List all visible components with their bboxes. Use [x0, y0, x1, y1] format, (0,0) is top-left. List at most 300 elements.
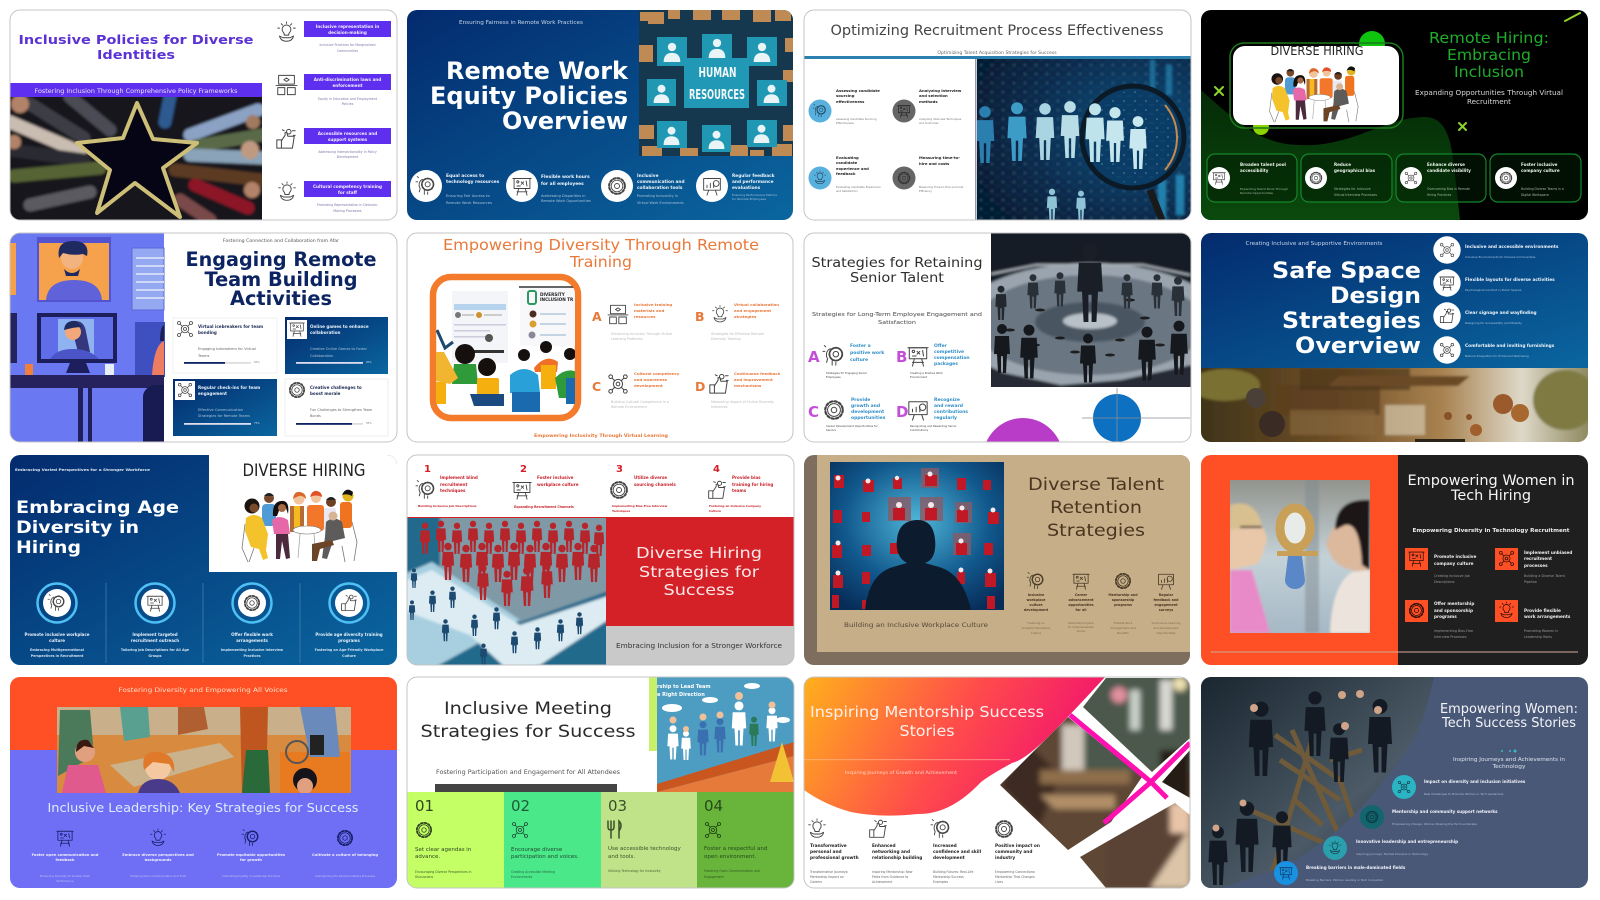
item B: virtual collaboration: Virtual collaboration: [734, 302, 779, 307]
item: assessing sourcing: effectiveness: [836, 99, 865, 104]
item: inclusive culture: culture: [1029, 603, 1043, 607]
item: inclusive communication: [601, 170, 685, 205]
item C: cultural competency: Cultural competency: [634, 371, 680, 376]
item 4: bias training: teams: [732, 488, 747, 493]
item: flexible layouts: Flexible layouts for diverse activities: [1465, 277, 1555, 283]
item: breaking barriers: Breaking barriers in male-dominated fields: [1306, 865, 1406, 870]
item: inclusive culture: Fostering an: [1027, 621, 1045, 625]
panel: Empowering Women in Tech Hiring: [1201, 455, 1588, 665]
item: inclusive culture: workplace: [1026, 598, 1046, 602]
item: anti-discrimination: [276, 74, 391, 106]
item D: recognition: and reward: [934, 403, 963, 409]
icon: board: [1073, 574, 1089, 589]
photo: human resources blocks: RESOURCES: [689, 88, 745, 103]
item: community impact: Empowering Connections:: [995, 870, 1035, 874]
item D: continuous feedback: [695, 371, 781, 409]
decoration: sparkle marks: [1215, 13, 1580, 130]
panel: Inclusive Policies for Diverse Identities: [10, 21, 391, 220]
title: Inclusive Leadership: Key Strategies for Success: [48, 801, 358, 815]
icon: board in grey circle: [892, 100, 916, 122]
decoration: green circles: [1253, 31, 1385, 135]
icon: team in teal circle: [1392, 775, 1416, 799]
icon: gear: [825, 401, 843, 419]
item: analyzing interviews: methods: [919, 99, 938, 104]
icon: people: [706, 822, 720, 838]
illustration: team on a ramp: [657, 677, 794, 792]
item: mentorship: Flexible Work: [1114, 621, 1133, 625]
card 03: accessible technology: and tools.: [608, 854, 635, 860]
card: icebreakers: Virtual icebreakers for team: [198, 324, 263, 329]
item: flexible arrangements: Leadership Roles: [1524, 635, 1552, 639]
item: confidence: Building Futures: Real-Life: [933, 870, 973, 874]
subtitle: Inspiring Journeys of Growth and Achievement: [845, 770, 957, 775]
item C: growth: growth and: [851, 403, 880, 409]
item: inclusive culture: [25, 584, 90, 658]
icon: tables: [1433, 269, 1461, 297]
item 2: workplace culture: 2: [520, 464, 527, 475]
card: creative challenges: Fun Challenges to Strengthen Team: [310, 408, 373, 412]
item: career advancement: for Underrepresented: [1068, 626, 1094, 629]
card 02: diverse participation: 02: [511, 797, 530, 815]
item: feedback surveys: feedback and: [1153, 598, 1179, 602]
red title panel: Strategies for: [639, 563, 760, 581]
item: embrace perspectives: Embrace diverse perspectives and: [122, 853, 194, 857]
card: reduce geographical bias: geographical bias: [1334, 168, 1376, 173]
item D: continuous feedback: Measuring Impact of Online Diversity: [711, 400, 774, 404]
title: Strategies for Success: [420, 722, 636, 742]
item: evaluating experience: and Satisfaction: [836, 189, 858, 193]
item: flexible layouts: Psychological Comfort in Public Spaces: [1465, 288, 1522, 292]
title: Inclusive Policies for Diverse: [18, 32, 254, 47]
subtitle: Expanding Opportunities Through Virtual: [1415, 89, 1563, 97]
item: cultural competency: Making Processes: [333, 209, 362, 213]
item C: cultural competency: development: [634, 383, 663, 388]
card 04: respectful environment: Fostering Open Communication and: [704, 869, 760, 873]
red title panel: Success: [664, 581, 734, 599]
item B: compensation: [896, 343, 970, 379]
item: regular feedback: [696, 170, 777, 202]
icon: board ring: [136, 584, 174, 622]
item 2: workplace culture: Expanding Recruitment Channels: [514, 505, 574, 509]
item: assessing sourcing: [808, 88, 880, 125]
item C: cultural competency: [592, 371, 680, 409]
item: career advancement: Groups: [1077, 630, 1086, 633]
icon: gear: [611, 482, 627, 498]
item B: virtual collaboration: and engagement: [734, 308, 771, 313]
item: flexible arrangements: [1495, 600, 1571, 639]
item D: recognition: contributions: [934, 409, 968, 415]
item 1: blind techniques: recruitment: [440, 482, 467, 487]
item: feedback surveys: surveys: [1159, 608, 1173, 612]
item C: growth: opportunities: [851, 415, 886, 421]
progress bar: 75%: 75%: [254, 421, 260, 425]
card 04: respectful environment: Foster a respectful and: [704, 846, 767, 852]
photo: magnifier over people network: [977, 59, 1190, 220]
item: regular feedback: Ensuring Performance Metrics: [732, 193, 777, 197]
item 2: workplace culture: Foster inclusive: [537, 475, 574, 480]
item: inclusive communication: Virtual Work Environments: [637, 201, 684, 205]
item: representation: Inclusive Practices for Marginalized: [319, 43, 376, 47]
item: equal access: Equal access to: [446, 173, 484, 179]
item B: virtual collaboration: Diversity Training: [711, 337, 741, 341]
icon: thumbs up: [277, 129, 295, 148]
grey subtitle panel: [606, 626, 794, 665]
title: Stories: [900, 723, 954, 740]
card: broaden talent pool: [1207, 154, 1297, 202]
item: clear signage: Clear signage and wayfinding: [1465, 310, 1537, 316]
item 4: bias training: 4: [713, 464, 720, 475]
item: transformative growth: personal and: [810, 849, 842, 855]
card 01: clear agendas: Set clear agendas in: [415, 847, 472, 853]
title: Strategies: [1282, 309, 1421, 334]
item: mentorship: sponsorship: [1112, 598, 1135, 602]
subtitle band: Fostering Inclusion Through Comprehensive Policy Frameworks: [34, 88, 238, 95]
title: Diversity in: [16, 518, 139, 538]
item: inclusive communication: communication and: [637, 179, 685, 185]
item: training programs: [315, 584, 384, 658]
icon: laptop and books: [276, 75, 297, 95]
icon: signage: [1433, 302, 1461, 330]
item: confidence: Increased: [933, 843, 957, 849]
item: unbiased processes: [1495, 548, 1572, 584]
icon: gears: [338, 831, 352, 845]
item C: growth: Provide: [851, 397, 870, 403]
grey subtitle panel: Embracing Inclusion for a Stronger Workforce: [616, 642, 782, 650]
card: check-ins: Regular check-ins for team: [198, 385, 260, 390]
item: feedback surveys: and Development: [1154, 626, 1179, 630]
item: feedback surveys: Opportunities: [1156, 631, 1176, 635]
item: targeted outreach: recruitment outreach: [131, 638, 179, 643]
item 3: sourcing channels: sourcing channels: [634, 482, 676, 487]
item A: training materials: Inclusive training: [634, 302, 672, 307]
title: Tech Hiring: [1450, 488, 1531, 504]
subtitle: Fostering Diversity and Empowering All Voices: [118, 687, 288, 694]
item: innovative leadership: Innovative leadership and entrepreneurship: [1356, 839, 1458, 844]
icon: hands: [175, 381, 195, 400]
item 4: bias training: Provide bias: [732, 475, 761, 480]
card 02: diverse participation: [504, 792, 601, 888]
item 3: sourcing channels: [611, 464, 676, 513]
item: assessing sourcing: sourcing: [836, 93, 855, 98]
item: training programs: Provide age diversity training: [315, 632, 383, 637]
item C: cultural competency: Building Cultural Competence in a: [611, 400, 669, 404]
progress bar: 60%: 60%: [254, 360, 260, 364]
item: mentorship: Interview Processes: [1434, 635, 1467, 639]
item: unbiased processes: Implement unbiased: [1524, 550, 1572, 555]
item B: virtual collaboration: Strategies for Effective Remote: [711, 332, 764, 336]
photo: human resources blocks: [639, 10, 793, 156]
icon: gear on orange: [1495, 548, 1518, 570]
item: flexible hours: for all employees: [541, 181, 584, 187]
item 1: blind techniques: [416, 464, 478, 508]
panel: Embracing Age Diversity in Hiring: [10, 455, 397, 665]
item: inclusive communication: Inclusive: [637, 173, 659, 179]
item B: virtual collaboration: strategies: [734, 314, 757, 319]
item: mentorship: programs: [1114, 603, 1132, 607]
item: unbiased processes: Building a Diverse Talent: [1524, 574, 1566, 578]
item: mentorship: programs: [1434, 614, 1457, 619]
item: networking: relationship building: [872, 855, 922, 861]
item: measuring time: Efficiency: [919, 189, 932, 193]
item B: compensation: B: [896, 348, 907, 366]
subtitle: Embracing Varied Perspectives for a Stronger Workforce: [15, 467, 150, 472]
subtitle: Building an Inclusive Workplace Culture: [844, 621, 988, 629]
item: flexible hours: Addressing Disparities in: [541, 194, 586, 198]
card: foster inclusive culture: Foster inclusive: [1521, 162, 1558, 167]
item: inclusive culture: Promote inclusive workplace: [25, 632, 90, 637]
icon: gear head in blue circle: [808, 100, 832, 122]
item B: virtual collaboration: [695, 302, 779, 341]
subtitle: Creating Inclusive and Supportive Environments: [1246, 241, 1383, 247]
item: evaluating experience: candidate: [836, 160, 858, 165]
item: breaking barriers: [1274, 861, 1406, 885]
item: accessible resources: support systems: [328, 137, 368, 142]
subtitle: Technology: [1491, 764, 1526, 770]
card 01: clear agendas: Discussions: [415, 875, 433, 879]
icon: board: [1208, 167, 1230, 189]
card: enhance candidate visibility: Hiring Practices: [1427, 193, 1452, 197]
subtitle: Fostering Connection and Collaboration from Afar: [223, 238, 339, 244]
title: Embracing Age: [16, 498, 179, 518]
item: evaluating experience: experience and: [836, 166, 869, 171]
item: transformative growth: professional growth: [810, 855, 859, 861]
item: measuring time: [892, 155, 963, 193]
photo: team climbing a wooden ladder: [1201, 677, 1441, 888]
icon: gear head: [823, 346, 842, 365]
item: representation: decision-making: [328, 30, 367, 35]
item 4: bias training: training for hiring: [732, 482, 773, 487]
item: career advancement: for all: [1076, 608, 1086, 612]
item: measuring time: Measuring time-to-: [919, 155, 960, 160]
item: innovative leadership: Inspiring Journeys: Female Pioneers in Technology: [1356, 852, 1428, 856]
item: inclusive culture: Culture: [1031, 631, 1041, 635]
title: Senior Talent: [850, 270, 944, 286]
card: foster inclusive culture: [1490, 154, 1581, 202]
panel: Remote Hiring: Embracing Inclusion: [1201, 10, 1588, 220]
item: networking: Enhanced: [872, 843, 896, 849]
item C: growth: development: [851, 409, 885, 415]
item: evaluating experience: [808, 155, 881, 193]
item: inclusive communication: collaboration tools: [637, 185, 683, 191]
item: networking: Achievement: [872, 880, 893, 884]
icon: gear head: [242, 830, 258, 846]
item: flexible arrangements: arrangements: [236, 638, 269, 643]
title: Inclusive Meeting: [444, 699, 612, 719]
item: evaluating experience: Evaluating Candidate Experience: [836, 185, 881, 189]
item: representation: [278, 21, 391, 53]
item: analyzing interviews: Analyzing interview: [919, 88, 962, 93]
photo: glass building in forest: [1190, 363, 1597, 447]
card 01: clear agendas: [407, 792, 504, 888]
card 03: accessible technology: Utilizing Technology for Inclusivity: [608, 869, 661, 873]
item: feedback surveys: Regular: [1159, 593, 1174, 597]
card 03: accessible technology: 03: [608, 797, 627, 815]
item D: continuous feedback: Continuous feedback: [734, 371, 781, 376]
icon: chart: [909, 402, 927, 420]
panel: Optimizing Recruitment Process Effectiveness: [804, 24, 1190, 220]
item: embrace perspectives: backgrounds: [145, 858, 172, 862]
icon: thumbs up: [870, 820, 886, 837]
card: broaden talent pool: Remote Opportunities: [1240, 191, 1273, 195]
item: mentorship: Implementing Bias-Free: [1434, 629, 1473, 633]
item: regular feedback: and performance: [732, 179, 774, 185]
item: assessing sourcing: Effectiveness: [836, 121, 854, 125]
card: online games: collaboration: [310, 330, 341, 335]
card: enhance candidate visibility: [1396, 154, 1486, 202]
icon: board on orange: [1405, 548, 1428, 570]
item: inclusive culture: Inclusive: [1028, 593, 1045, 597]
illustration: diverse classroom: [57, 707, 351, 797]
icon: team idea: [278, 22, 295, 41]
item: flexible hours: [506, 170, 591, 203]
item: open communication: Foster open communication and: [32, 853, 99, 857]
progress bar: 85%: 85%: [366, 421, 372, 425]
item 4: bias training: Fostering an Inclusive Company: [709, 504, 761, 508]
item C: cultural competency: C: [592, 379, 601, 394]
item: anti-discrimination: Policies: [342, 102, 354, 106]
panel: Diverse Talent Retention Strategies: [804, 455, 1190, 665]
card: broaden talent pool: accessibility: [1240, 168, 1269, 173]
icon: bulb: [712, 306, 728, 322]
item: comfortable furnishings: Comfortable and inviting furnishings: [1465, 343, 1555, 349]
card: icebreakers: Engaging Icebreakers for Virtual: [198, 347, 256, 351]
card: enhance candidate visibility: Overcoming Bias in Remote: [1427, 187, 1470, 191]
item: equal access: Ensuring Fair Access to: [446, 193, 491, 198]
title: Strategies: [1047, 521, 1145, 540]
card 03: accessible technology: Use accessible technology: [608, 846, 682, 852]
item: transformative growth: Careers: [810, 880, 822, 884]
item: confidence: Examples: [933, 880, 948, 884]
item: clear signage: Designing for Accessibility and Mobility: [1465, 321, 1522, 325]
subtitle: Fostering Participation and Engagement for All Attendees: [436, 769, 620, 776]
item: analyzing interviews: [892, 88, 962, 125]
item A: training materials: [592, 302, 672, 341]
item: assessing sourcing: Assessing Candidate Sourcing: [836, 117, 877, 121]
card: creative challenges: boost morale: [310, 391, 341, 396]
item: accessible resources: [277, 128, 391, 159]
item: targeted outreach: Groups: [148, 654, 162, 658]
item: inclusive culture: Perspectives in Recruitment: [31, 654, 84, 658]
subtitle: Optimizing Talent Acquisition Strategies for Success: [937, 50, 1057, 56]
card: enhance candidate visibility: candidate visibility: [1427, 168, 1471, 173]
icon: gears: [1495, 167, 1517, 189]
icon: person: [1400, 167, 1422, 189]
icon: chess knight: [709, 481, 725, 498]
item A: positive culture: Strategies for Engaging Senior: [826, 371, 868, 375]
item: confidence: Mentorship Success: [933, 875, 964, 879]
item: open communication: Performance: [56, 879, 74, 883]
panel: Safe Space Design Strategies Overview: [1190, 233, 1597, 447]
icon: laptop books: [608, 305, 628, 324]
icon: globe: [996, 821, 1012, 837]
card 01: clear agendas: Encouraging Diverse Perspectives in: [415, 870, 471, 874]
icon: bulb in teal circle: [1323, 836, 1347, 860]
item: belonging: [312, 831, 378, 878]
card: icebreakers: bonding: [198, 330, 217, 335]
item B: compensation: compensation: [934, 355, 970, 361]
title: Design: [1330, 284, 1421, 309]
item C: growth: [808, 397, 886, 432]
item: inclusive culture: Embracing Multigenerational: [30, 648, 84, 652]
item: flexible arrangements: Offer flexible work: [231, 632, 273, 637]
card: reduce geographical bias: [1301, 154, 1392, 202]
item: equal access: Remote Work Resources: [446, 200, 492, 205]
icon: gear head: [416, 481, 434, 498]
item A: positive culture: culture: [850, 357, 868, 363]
item: career advancement: [1068, 574, 1094, 633]
card: online games: Creative Online Games to Foster: [310, 347, 368, 351]
title: Empowering Women:: [1440, 701, 1578, 717]
icon: chess ring: [330, 584, 368, 622]
item D: continuous feedback: mechanisms: [734, 383, 762, 388]
item: clear signage: [1433, 302, 1537, 330]
title: Equity Policies: [430, 82, 628, 110]
item: regular feedback: for Remote Employees: [732, 197, 766, 201]
icon: chart board: [696, 170, 728, 202]
subtitle band: [10, 83, 262, 97]
panel: Engaging Remote Team Building Activities: [10, 233, 397, 442]
item D: continuous feedback: D: [695, 379, 705, 394]
item 2: workplace culture: workplace culture: [537, 482, 579, 487]
title: Overview: [1295, 334, 1421, 359]
item A: training materials: resources: [634, 314, 656, 319]
photo: two women facing: [1225, 475, 1375, 638]
title: Empowering Women in: [1408, 473, 1574, 489]
icon: bulb in blue circle: [808, 166, 832, 190]
item: inclusive culture: [1405, 548, 1477, 584]
item: equal access: technology resources: [446, 179, 500, 185]
item: equitable opportunities: for growth: [240, 858, 262, 862]
item: targeted outreach: [121, 584, 190, 658]
icon: gears in dark teal circle: [1360, 805, 1384, 829]
card: check-ins: [173, 379, 277, 436]
photo: red and blue figures on boards: [402, 513, 611, 670]
item A: positive culture: positive work: [850, 350, 885, 356]
card: reduce geographical bias: Strategies for Inclusive: [1334, 187, 1371, 191]
card: creative challenges: Bonds: [310, 414, 321, 418]
card 01: clear agendas: advance.: [415, 854, 440, 860]
item B: compensation: competitive: [934, 349, 964, 355]
icon: board: [513, 482, 531, 499]
item: inclusive culture: Creating Inclusive Job: [1434, 574, 1470, 578]
item: networking: networking and: [872, 849, 910, 855]
title: Team Building: [204, 268, 358, 291]
item: cultural competency: [279, 181, 391, 213]
icon: team gear: [512, 822, 528, 838]
illustration: diverse hiring: [1230, 43, 1403, 128]
title: Remote Work: [446, 57, 629, 85]
item: accessible resources: Development: [337, 155, 359, 159]
card: creative challenges: [285, 379, 388, 436]
subtitle: Satisfaction: [878, 320, 917, 326]
item D: continuous feedback: Initiatives: [711, 405, 728, 409]
panel: Empowering Women: Tech Success Stories: [1201, 677, 1588, 888]
item: targeted outreach: Tailoring Job Descriptions for All Age: [121, 648, 190, 652]
item A: training materials: materials and: [634, 308, 664, 313]
card 04: respectful environment: [697, 792, 794, 888]
item: regular feedback: Regular feedback: [732, 173, 775, 179]
card: broaden talent pool: Broaden talent pool: [1240, 162, 1287, 167]
icon: gear team: [609, 375, 627, 393]
illustration: diverse hiring: DIVERSE HIRING: [242, 461, 366, 481]
icon: bulb in hand: [279, 182, 295, 200]
illustration: team on a ramp: rship to Lead Team: [657, 684, 711, 690]
item: transformative growth: Mentorship Impact on: [810, 875, 844, 879]
card: creative challenges: Creative challenges to: [310, 385, 362, 390]
title: Embracing: [1447, 46, 1531, 64]
icon: badge: [290, 383, 304, 397]
item: open communication: [32, 831, 99, 883]
